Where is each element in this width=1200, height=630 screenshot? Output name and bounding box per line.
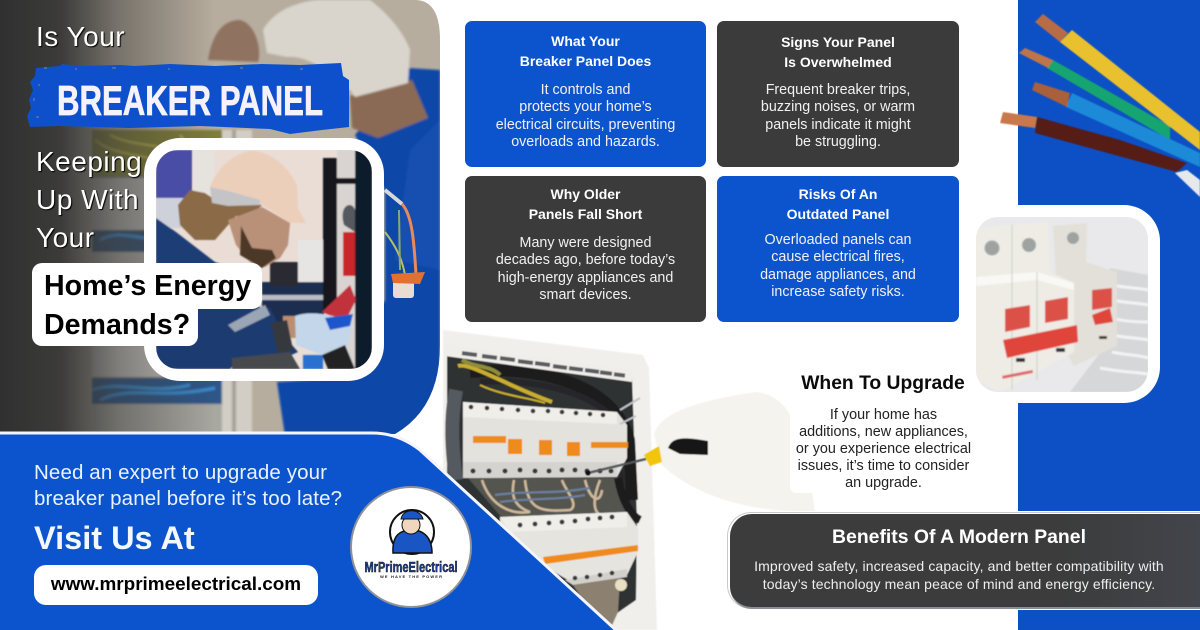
- button: website address: www.mrprimeelectrical.com: [51, 574, 301, 595]
- hair: [178, 190, 262, 240]
- panel: benefits of a modern panel: [727, 511, 1200, 610]
- card: what your breaker panel does: protects your home’s: [519, 99, 652, 115]
- card: why older panels fall short: Panels Fall Short: [529, 206, 642, 222]
- heading: Home's Energy Demands: Demands?: [44, 309, 190, 341]
- card: why older panels fall short: decades ago, before today’s: [496, 252, 675, 268]
- panel: right blue strip with copper wires: [1000, 0, 1200, 630]
- button: website address: [34, 565, 318, 605]
- card: why older panels fall short: [465, 176, 706, 322]
- card: what your breaker panel does: It controls and: [541, 82, 630, 98]
- text: benefits body: [754, 558, 1164, 592]
- icon: Mr Prime Electrical logo: WE HAVE THE POWER: [380, 574, 442, 579]
- text: when to upgrade body: If your home has: [830, 407, 937, 423]
- card: risks of an outdated panel: Risks Of An: [799, 186, 877, 202]
- card: signs your panel is overwhelmed: Signs Your Panel: [781, 34, 895, 50]
- card: signs your panel is overwhelmed: buzzing noises, or warm: [761, 99, 915, 115]
- panel: call to action: [0, 432, 618, 630]
- heading: Visit Us At: Visit Us At: [34, 520, 195, 556]
- heading: Keeping Up With Your: Keeping: [36, 146, 142, 177]
- card: what your breaker panel does: Breaker Panel Does: [520, 52, 651, 68]
- neck: [350, 80, 428, 138]
- card: risks of an outdated panel: cause electrical fires,: [771, 249, 905, 265]
- card: risks of an outdated panel: Outdated Panel: [787, 206, 889, 222]
- dark wiring cavity: [447, 352, 637, 625]
- text: call to action question: [34, 461, 342, 510]
- heading: benefits: Benefits Of A Modern Panel: [832, 526, 1086, 548]
- heading: Home's Energy Demands: Home’s Energy: [44, 270, 251, 302]
- text: benefits body: Improved safety, increased capacity, and better compatibility with: [754, 558, 1164, 574]
- panel: circuit breaker photo: [976, 205, 1160, 403]
- card: what your breaker panel does: electrical circuits, preventing: [496, 117, 675, 133]
- third breaker: [1053, 223, 1117, 366]
- heading: Home's Energy Demands: [32, 263, 262, 346]
- card: risks of an outdated panel: Overloaded panels can: [764, 232, 912, 248]
- hand: [208, 20, 259, 62]
- card: why older panels fall short: Why Older: [550, 186, 620, 202]
- card: risks of an outdated panel: increase safety risks.: [771, 284, 905, 300]
- terminal screws: [984, 240, 1000, 256]
- top rail with labels: [445, 345, 632, 382]
- heading: Keeping Up With Your: Up With: [36, 184, 139, 215]
- card: risks of an outdated panel: damage appliances, and: [760, 267, 916, 283]
- card: signs your panel is overwhelmed: Frequent breaker trips,: [766, 82, 910, 98]
- heading: Keeping Up With Your: Your: [36, 222, 95, 253]
- text: when to upgrade body: or you experience electrical: [796, 441, 971, 457]
- card: why older panels fall short: high-energy appliances and: [498, 270, 673, 286]
- breaker row 1: [463, 402, 627, 478]
- card: why older panels fall short: smart devices.: [539, 287, 632, 303]
- heading: When To Upgrade: When To Upgrade: [801, 373, 965, 394]
- enclosure: [443, 330, 657, 630]
- black cable bundles: [452, 371, 632, 500]
- text: when to upgrade body: issues, it’s time to consider: [798, 458, 969, 474]
- icon: gloved hand with screwdriver: [586, 392, 815, 512]
- breaker row 2: [500, 512, 638, 583]
- card: what your breaker panel does: What Your: [551, 33, 620, 49]
- card: signs your panel is overwhelmed: Is Overwhelmed: [784, 54, 892, 70]
- panel: inset photo of technician: [144, 138, 384, 381]
- icon: Mr Prime Electrical logo: [350, 486, 472, 608]
- text: call to action question: breaker panel before it’s too late?: [34, 487, 342, 510]
- icon: loose colored connector wires: [384, 188, 425, 298]
- text: when to upgrade body: additions, new appliances,: [799, 424, 968, 440]
- double breaker: [987, 242, 1074, 380]
- card: what your breaker panel does: overloads and hazards.: [511, 134, 660, 150]
- text: call to action question: Need an expert to upgrade your: [34, 461, 327, 484]
- panel: hero photo of electrician: [0, 0, 440, 434]
- card: risks of an outdated panel: [717, 176, 959, 322]
- text: when to upgrade body: an upgrade.: [845, 475, 922, 491]
- lower wires: [573, 578, 620, 630]
- heading banner: Breaker Panel: [27, 63, 349, 134]
- card: signs your panel is overwhelmed: [717, 21, 959, 167]
- black loop right: [618, 478, 640, 520]
- face: [228, 207, 290, 267]
- jacket: [156, 218, 221, 263]
- colored wires: [468, 478, 630, 518]
- electrical cabinet: [93, 175, 166, 378]
- heading: Is Your: Is Your: [36, 21, 125, 52]
- device: [322, 285, 356, 322]
- card: signs your panel is overwhelmed: be struggling.: [795, 134, 881, 150]
- card: signs your panel is overwhelmed: panels indicate it might: [765, 117, 911, 133]
- suit: [277, 68, 440, 436]
- helmet: [263, 0, 410, 97]
- text: when to upgrade body: [790, 407, 977, 493]
- text: benefits body: today’s technology mean peace of mind and energy efficiency.: [763, 576, 1155, 592]
- card: what your breaker panel does: [465, 21, 706, 167]
- heading: Keeping Up With Your: [36, 146, 142, 253]
- panel: open breaker box with gloved hand photo: [443, 330, 815, 630]
- card: why older panels fall short: Many were designed: [520, 235, 651, 251]
- red levers: [1005, 305, 1030, 332]
- watch and glove: [283, 316, 298, 338]
- hard hat: [210, 151, 306, 223]
